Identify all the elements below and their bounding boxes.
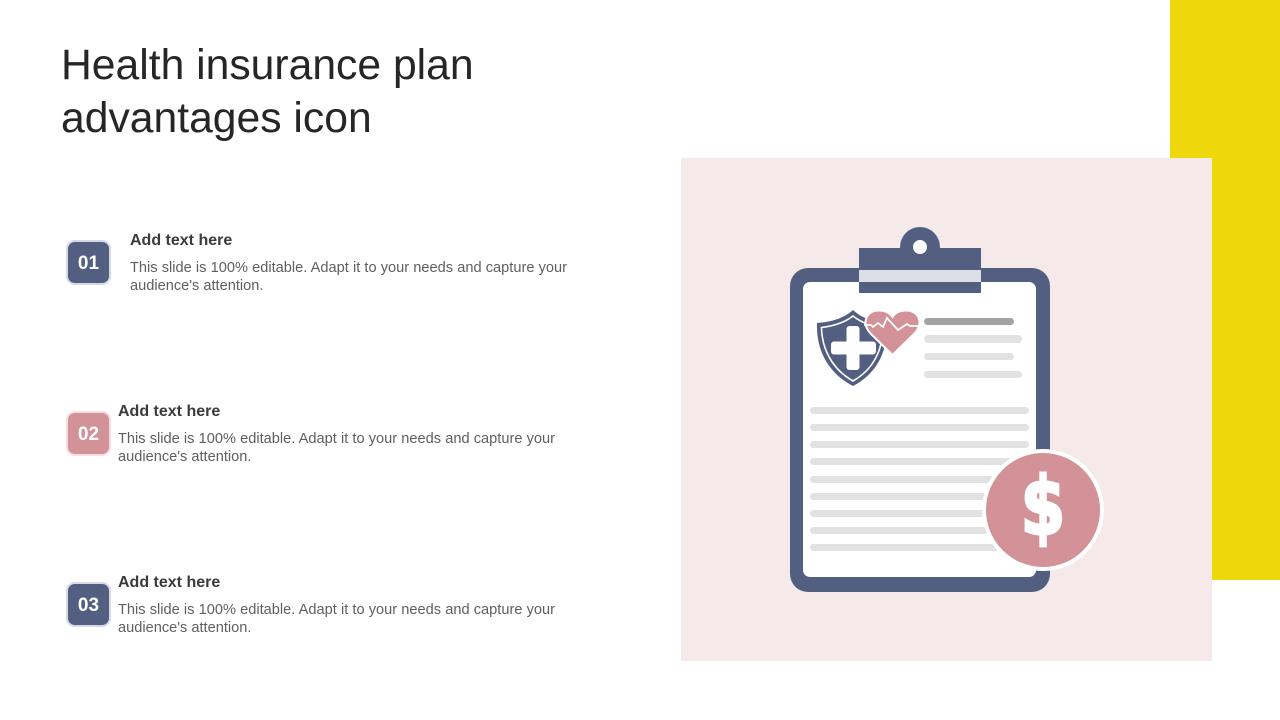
icon: heart with pulse [864, 310, 919, 355]
title: Health insurance plan [61, 41, 474, 89]
icon: clipboard [790, 227, 1050, 592]
badge 03: 03 [78, 595, 99, 616]
body text 03 [118, 602, 555, 636]
text block 01 [130, 232, 567, 294]
body text 03: audience's attention. [118, 620, 251, 636]
badge 02: 02 [78, 424, 99, 445]
pink illustration panel [681, 158, 1212, 661]
title [61, 41, 474, 142]
title: advantages icon [61, 94, 372, 142]
heading 02: Add text here [118, 403, 220, 420]
icon: dollar coin [982, 449, 1104, 571]
body text 01 [130, 260, 567, 294]
body text 02: audience's attention. [118, 449, 251, 465]
yellow accent block [1170, 0, 1280, 580]
text block 02 [118, 403, 555, 465]
body text 02: This slide is 100% editable. Adapt it to your needs and capture your [118, 431, 555, 447]
document header lines [924, 318, 1022, 378]
badge 01: 01 [78, 253, 99, 274]
icon: dollar coin: $ [1021, 461, 1065, 554]
body text 03: This slide is 100% editable. Adapt it to your needs and capture your [118, 602, 555, 618]
body text 02 [118, 431, 555, 465]
badge 03 [66, 582, 111, 627]
badge 02 [66, 411, 111, 456]
icon: shield with cross [817, 310, 887, 386]
heading 01: Add text here [130, 232, 232, 249]
text block 03 [118, 574, 555, 636]
document body lines [810, 407, 1029, 551]
badge 01 [66, 240, 111, 285]
body text 01: audience's attention. [130, 278, 263, 294]
body text 01: This slide is 100% editable. Adapt it to your needs and capture your [130, 260, 567, 276]
heading 03: Add text here [118, 574, 220, 591]
